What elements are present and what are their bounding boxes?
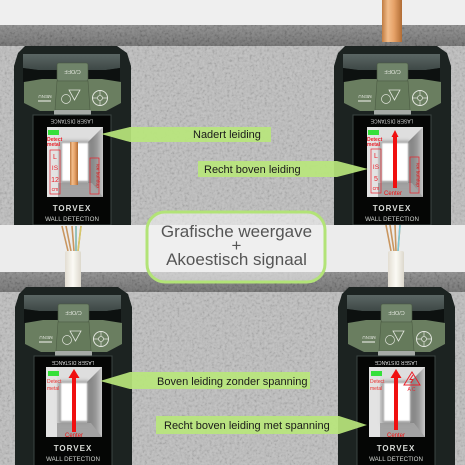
laser distance label: LASER DISTANCE	[50, 118, 93, 124]
callout: directly above pipe with voltage	[156, 416, 367, 434]
device: bottom left, above pipe without voltage	[15, 287, 132, 465]
power button label: C/OFF	[65, 309, 82, 315]
distance box: 5	[374, 176, 378, 183]
copper pipe	[382, 0, 402, 42]
detect metal label: Detect	[370, 379, 384, 385]
distance box	[371, 149, 381, 193]
detect metal label: metal	[47, 142, 61, 148]
brand: TORVEX	[377, 444, 415, 453]
callout: directly above pipe with voltage: Recht boven leiding met spanning	[164, 420, 330, 432]
side box	[410, 157, 420, 193]
power button label: C/OFF	[388, 309, 405, 315]
center label: Center	[65, 433, 83, 439]
central message panel	[147, 212, 325, 282]
center label: Center	[384, 191, 402, 197]
menu label: MENU	[362, 335, 376, 340]
callout: approaching pipe: Nadert leiding	[193, 129, 261, 141]
center arrow	[392, 130, 398, 188]
distance box: cm	[373, 186, 379, 192]
detect metal label: Detect	[47, 379, 61, 385]
screen display	[46, 367, 102, 437]
product label: WALL DETECTION	[365, 216, 419, 223]
green battery	[48, 371, 59, 376]
distance box: cm	[52, 187, 58, 193]
voltage warning icon: AC	[408, 387, 416, 393]
product label: WALL DETECTION	[369, 456, 423, 463]
distance box: 12	[51, 177, 59, 184]
screen display	[367, 127, 423, 197]
detect metal label: metal	[47, 386, 59, 392]
center arrow	[390, 369, 402, 430]
distance box: IS	[52, 165, 59, 172]
product label: WALL DETECTION	[45, 216, 99, 223]
heading line one: Grafische weergave	[161, 222, 312, 241]
detect metal label: Detect	[367, 137, 382, 143]
menu label: MENU	[358, 94, 372, 99]
voltage warning icon	[404, 372, 420, 393]
device: bottom right, above pipe with voltage	[338, 287, 455, 465]
menu label: MENU	[39, 335, 53, 340]
callout: directly above pipe: Recht boven leiding	[204, 164, 301, 176]
laser distance label: LASER DISTANCE	[374, 359, 417, 365]
green battery	[48, 130, 59, 135]
detect metal label: metal	[367, 142, 381, 148]
detect metal label: metal	[370, 386, 382, 392]
callout: above pipe without voltage	[100, 372, 310, 389]
heading line two: Akoestisch signaal	[166, 250, 307, 269]
device: top left, approaching pipe	[14, 46, 131, 225]
distance box: L	[53, 154, 57, 161]
distance box: IS	[373, 164, 380, 171]
callout: approaching pipe	[101, 127, 271, 142]
brand: TORVEX	[373, 204, 411, 213]
menu label: MENU	[38, 94, 52, 99]
detect metal label: Detect	[47, 137, 62, 143]
green battery	[368, 130, 379, 135]
callout: above pipe without voltage: Boven leiding zonder spanning	[157, 376, 307, 388]
brand: TORVEX	[54, 444, 92, 453]
screen display	[47, 127, 103, 197]
brand: TORVEX	[53, 204, 91, 213]
cable right	[386, 225, 404, 290]
side box	[90, 158, 100, 194]
cable left	[62, 226, 81, 291]
power button label: C/OFF	[384, 68, 401, 74]
plus sign: +	[232, 236, 242, 255]
callout: directly above pipe	[198, 161, 368, 177]
product label: WALL DETECTION	[46, 456, 100, 463]
screen display	[369, 367, 425, 437]
side box: Ice buildup	[416, 163, 420, 187]
laser distance label: LASER DISTANCE	[370, 118, 413, 124]
green battery	[371, 371, 382, 376]
center arrow	[68, 369, 80, 432]
pipe on screen	[70, 142, 78, 185]
distance box: L	[374, 153, 378, 160]
laser distance label: LASER DISTANCE	[51, 359, 94, 365]
center label: Center	[387, 433, 405, 439]
distance box	[50, 150, 60, 194]
power button label: C/OFF	[64, 68, 81, 74]
device: top right, directly above pipe	[334, 46, 451, 225]
side box: Ice buildup	[96, 164, 100, 188]
